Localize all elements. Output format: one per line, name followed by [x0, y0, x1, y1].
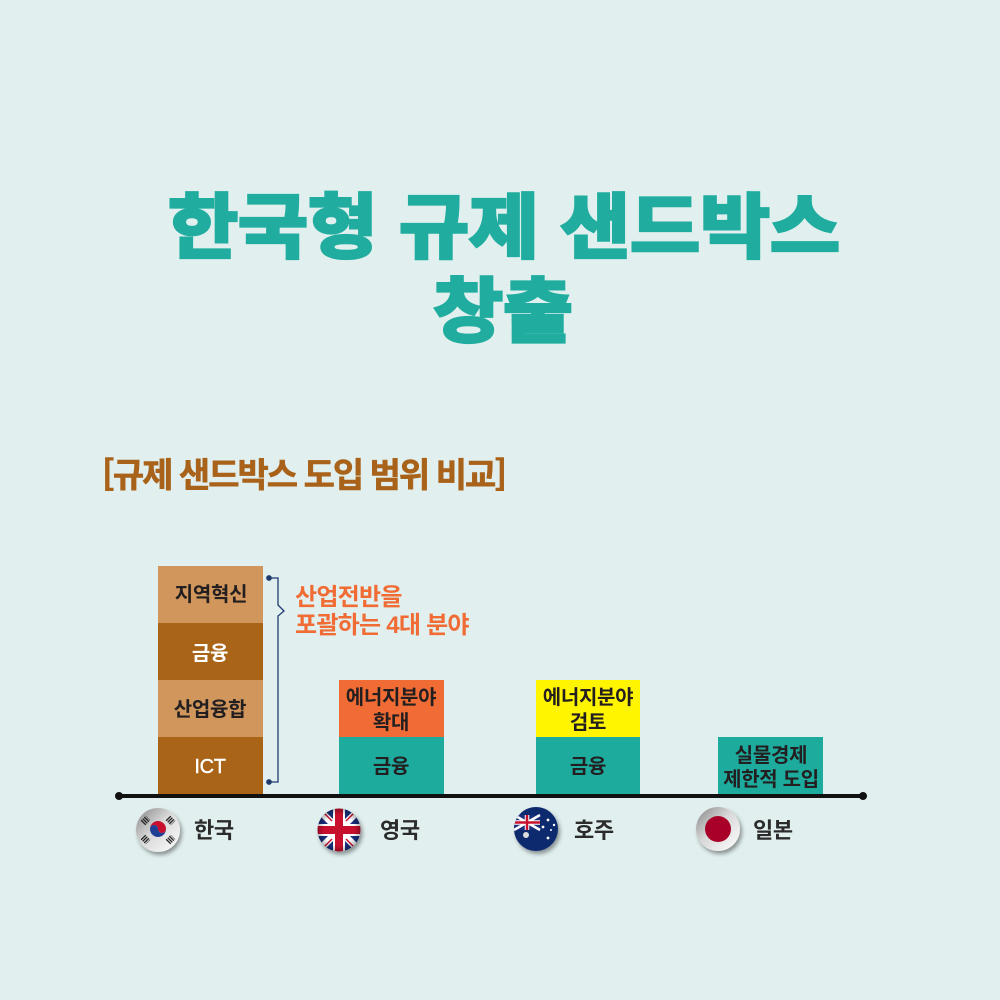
label: 한국: 한국	[194, 818, 234, 843]
callout: 4 fields	[295, 584, 469, 639]
segment: ICT: ICT	[194, 756, 226, 778]
segment: 에너지분야 검토: 검토	[570, 711, 606, 734]
title: 한국형 규제 샌드박스	[168, 171, 840, 273]
segment: 지역혁신	[158, 566, 263, 623]
segment: 에너지분야 검토: 에너지분야	[543, 686, 633, 709]
label: 일본: 일본	[753, 818, 793, 843]
bar: Japan: 실물경제	[735, 744, 807, 767]
flag: UK	[317, 808, 361, 852]
callout: 4 fields: 산업전반을	[295, 584, 402, 611]
bar: Japan	[718, 737, 823, 795]
segment: 지역혁신: 지역혁신	[175, 583, 247, 606]
bracket	[267, 576, 284, 784]
bar: Korea	[158, 566, 263, 795]
segment: 에너지분야 확대	[339, 680, 444, 737]
segment: 산업융합	[158, 680, 263, 737]
segment: 에너지분야 검토	[536, 680, 640, 737]
flag: Australia	[514, 807, 558, 851]
segment: ICT	[158, 737, 263, 795]
segment: 금융: 금융	[570, 755, 606, 778]
axis	[115, 792, 867, 800]
segment: 금융: 금융	[373, 755, 409, 778]
label: 영국: 영국	[380, 818, 420, 843]
bar: Japan: 제한적 도입	[723, 768, 819, 791]
segment: 산업융합: 산업융합	[174, 698, 246, 721]
title	[168, 171, 840, 357]
flag: Japan	[696, 807, 740, 851]
label: 호주: 호주	[574, 818, 614, 843]
bar: Australia	[536, 680, 640, 795]
segment: 금융	[158, 623, 263, 680]
segment: 에너지분야 확대: 확대	[373, 711, 409, 734]
callout: 4 fields: 포괄하는 4대 분야	[295, 612, 469, 639]
title: 창출	[433, 255, 573, 357]
section heading: [규제 샌드박스 도입 범위 비교]	[102, 448, 505, 497]
bar: UK	[339, 680, 444, 795]
flag: Korea	[136, 808, 180, 852]
segment: 금융: 금융	[192, 642, 228, 665]
segment: 에너지분야 확대: 에너지분야	[346, 686, 436, 709]
